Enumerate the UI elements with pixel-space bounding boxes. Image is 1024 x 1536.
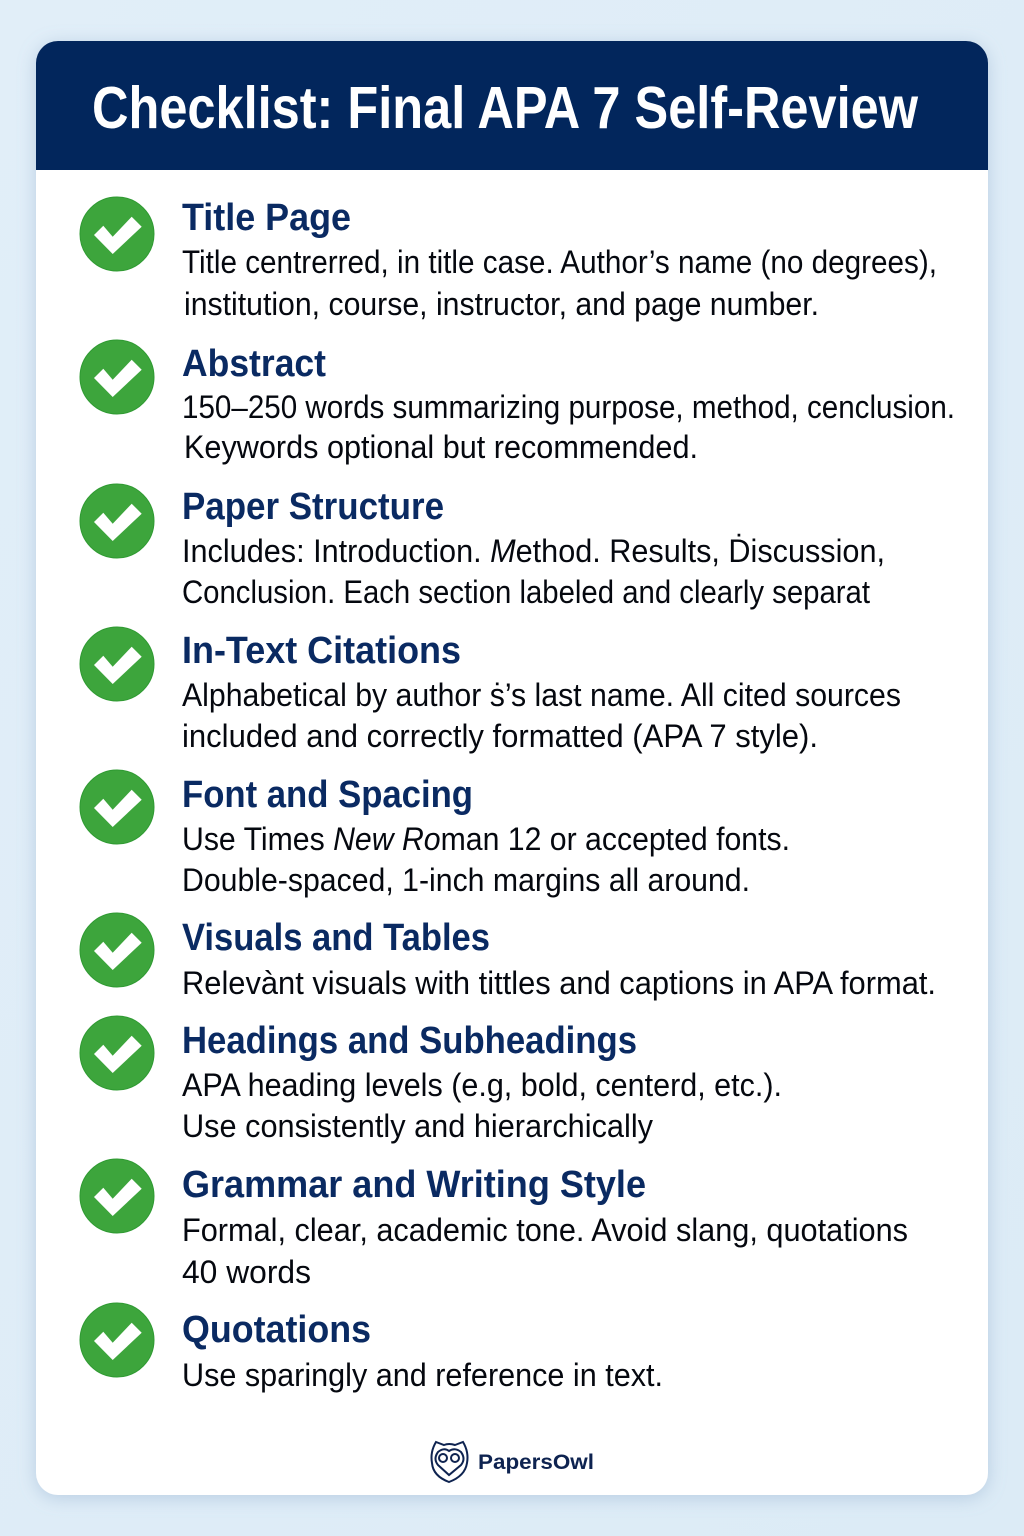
item: Abstract: 150–250 words summarizing purpose, method, cenclusion. <box>182 389 955 425</box>
item: Font and Spacing: Font and Spacing <box>182 774 473 816</box>
item: Font and Spacing: Double-spaced, 1-inch margins all around. <box>182 862 750 898</box>
item: Headings and Subheadings: APA heading levels (e.g, bold, centerd, etc.). <box>182 1067 782 1103</box>
item: Abstract: Keywords optional but recommended. <box>184 429 698 465</box>
item: Grammar and Writing Style: Formal, clear, academic tone. Avoid slang, quotations <box>182 1212 908 1248</box>
item: Abstract: Abstract <box>182 343 326 385</box>
item: Title Page: institution, course, instructor, and page number. <box>184 286 819 322</box>
item: Grammar and Writing Style <box>80 1159 908 1290</box>
item: In-Text Citations: Alphabetical by author ṡ’s last name. All cited sources <box>182 677 901 713</box>
item: Paper Structure <box>80 484 885 610</box>
item: Font and Spacing <box>80 770 790 898</box>
header banner <box>36 41 988 170</box>
item: Paper Structure: Includes: Introduction. Method. Results, Ḋiscussion, <box>182 533 885 569</box>
item: Paper Structure: Paper Structure <box>182 486 444 528</box>
item: Visuals and Tables: Visuals and Tables <box>182 917 490 959</box>
item: Quotations: Quotations <box>182 1309 371 1351</box>
item: In-Text Citations <box>80 627 901 754</box>
logo: PapersOwl <box>432 1442 594 1482</box>
item: Abstract <box>80 340 955 465</box>
item: Font and Spacing: Use Times New Roman 12 or accepted fonts. <box>182 821 790 857</box>
item: Title Page: Title Page <box>182 197 351 239</box>
icon: owl <box>432 1442 468 1482</box>
item: Title Page: Title centrerred, in title case. Author’s name (no degrees), <box>182 244 937 280</box>
item: Headings and Subheadings: Headings and Subheadings <box>182 1020 637 1062</box>
item: Visuals and Tables <box>80 913 936 1001</box>
item: In-Text Citations: included and correctly formatted (APA 7 style). <box>182 718 818 754</box>
item: Quotations: Use sparingly and reference in text. <box>182 1357 663 1393</box>
item: Quotations <box>80 1303 663 1393</box>
item: Grammar and Writing Style: Grammar and Writing Style <box>182 1164 646 1206</box>
item: Grammar and Writing Style: 40 words <box>182 1254 311 1290</box>
item: Visuals and Tables: Relevànt visuals with tittles and captions in APA format. <box>182 965 936 1001</box>
item: Title Page <box>80 197 937 322</box>
item: Paper Structure: Conclusion. Each section labeled and clearly separat <box>182 574 870 610</box>
item: Headings and Subheadings: Use consistently and hierarchically <box>182 1108 653 1144</box>
brand name: PapersOwl <box>478 1451 594 1474</box>
item: Headings and Subheadings <box>80 1016 782 1144</box>
item: In-Text Citations: In-Text Citations <box>182 630 461 672</box>
